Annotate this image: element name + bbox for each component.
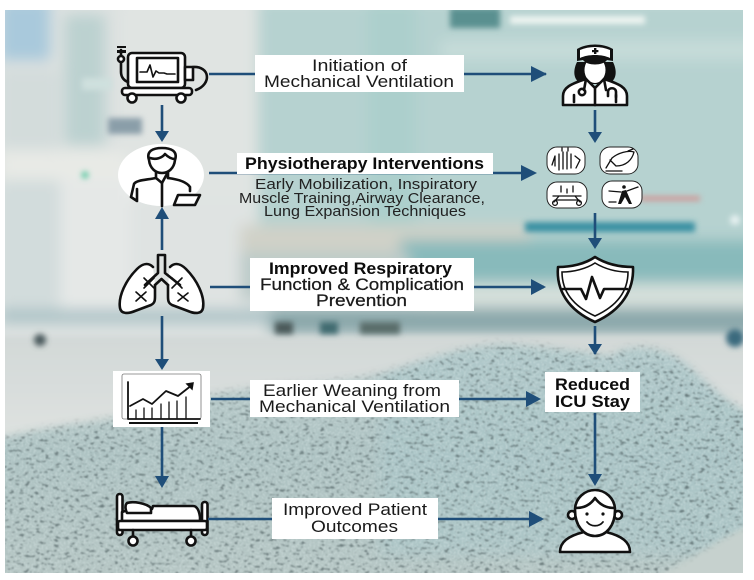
label: physiotherapy interventions with detail: Physiotherapy Interventions	[245, 155, 484, 173]
icon: shield with heartbeat	[558, 257, 633, 322]
icon: muscle training	[547, 182, 587, 208]
label: physiotherapy interventions with detail: Muscle Training,Airway Clearance,	[239, 191, 485, 207]
icon: physiotherapist in white circle	[118, 144, 204, 206]
label: earlier weaning from mechanical ventilation: Mechanical Ventilation	[259, 398, 450, 416]
sand mound	[0, 330, 754, 580]
label: initiation of mechanical ventilation: Mechanical Ventilation	[264, 73, 454, 91]
label: physiotherapy interventions with detail: Early Mobilization, Inspiratory	[255, 177, 478, 193]
arrow: bed to improved outcomes label to patient	[208, 511, 544, 527]
arrow: lungs up to physiotherapist	[155, 207, 169, 250]
label: improved respiratory function and complication prevention: Improved Respiratory	[269, 260, 453, 278]
arrow: interventions down to shield	[588, 213, 602, 249]
icon: nurse	[563, 44, 627, 105]
label: improved patient outcomes: Outcomes	[311, 518, 398, 536]
arrow: chart down to bed	[155, 427, 169, 488]
icon: airway clearance	[600, 147, 638, 174]
label: earlier weaning from mechanical ventilation	[250, 380, 459, 417]
icon: early mobilization	[547, 147, 585, 174]
label: improved patient outcomes	[272, 498, 438, 539]
icon: lung expansion walking figure	[602, 181, 642, 208]
arrow: ventilator to initiation label to nurse	[209, 66, 547, 82]
icon: ventilator machine	[117, 46, 207, 102]
arrow: reduced ICU stay down to patient	[588, 413, 602, 486]
icons: four physiotherapy interventions	[547, 147, 642, 208]
label: initiation of mechanical ventilation: Initiation of	[312, 57, 407, 75]
arrow: ventilator down to physiotherapist	[155, 105, 169, 142]
label: reduced ICU stay: ICU Stay	[555, 393, 631, 411]
label: reduced ICU stay: Reduced	[555, 376, 630, 394]
arrow: physiotherapist to interventions	[209, 165, 537, 181]
label: physiotherapy interventions with detail	[237, 153, 493, 220]
label: initiation of mechanical ventilation	[255, 55, 464, 92]
icon: smiling patient	[560, 490, 630, 552]
arrow: lungs to improved respiratory label to shield	[210, 279, 546, 295]
label: improved patient outcomes: Improved Patient	[283, 501, 427, 519]
label: earlier weaning from mechanical ventilation: Earlier Weaning from	[263, 382, 441, 400]
arrow: shield down to reduced ICU stay	[588, 326, 602, 355]
icon: weaning trend chart on white card	[113, 371, 210, 427]
label: improved respiratory function and complication prevention: Function & Complication	[260, 276, 464, 294]
label: improved respiratory function and complication prevention	[250, 258, 474, 311]
icon: lungs	[120, 255, 203, 313]
arrow: chart to earlier weaning label to reduced ICU stay	[211, 391, 541, 407]
label: physiotherapy interventions with detail: Lung Expansion Techniques	[264, 204, 466, 220]
label: reduced ICU stay	[545, 372, 640, 412]
arrow: nurse down to interventions icons	[588, 110, 602, 143]
arrow: lungs down to chart	[155, 316, 169, 370]
icon: hospital bed	[117, 494, 208, 546]
label: improved respiratory function and complication prevention: Prevention	[316, 292, 407, 310]
